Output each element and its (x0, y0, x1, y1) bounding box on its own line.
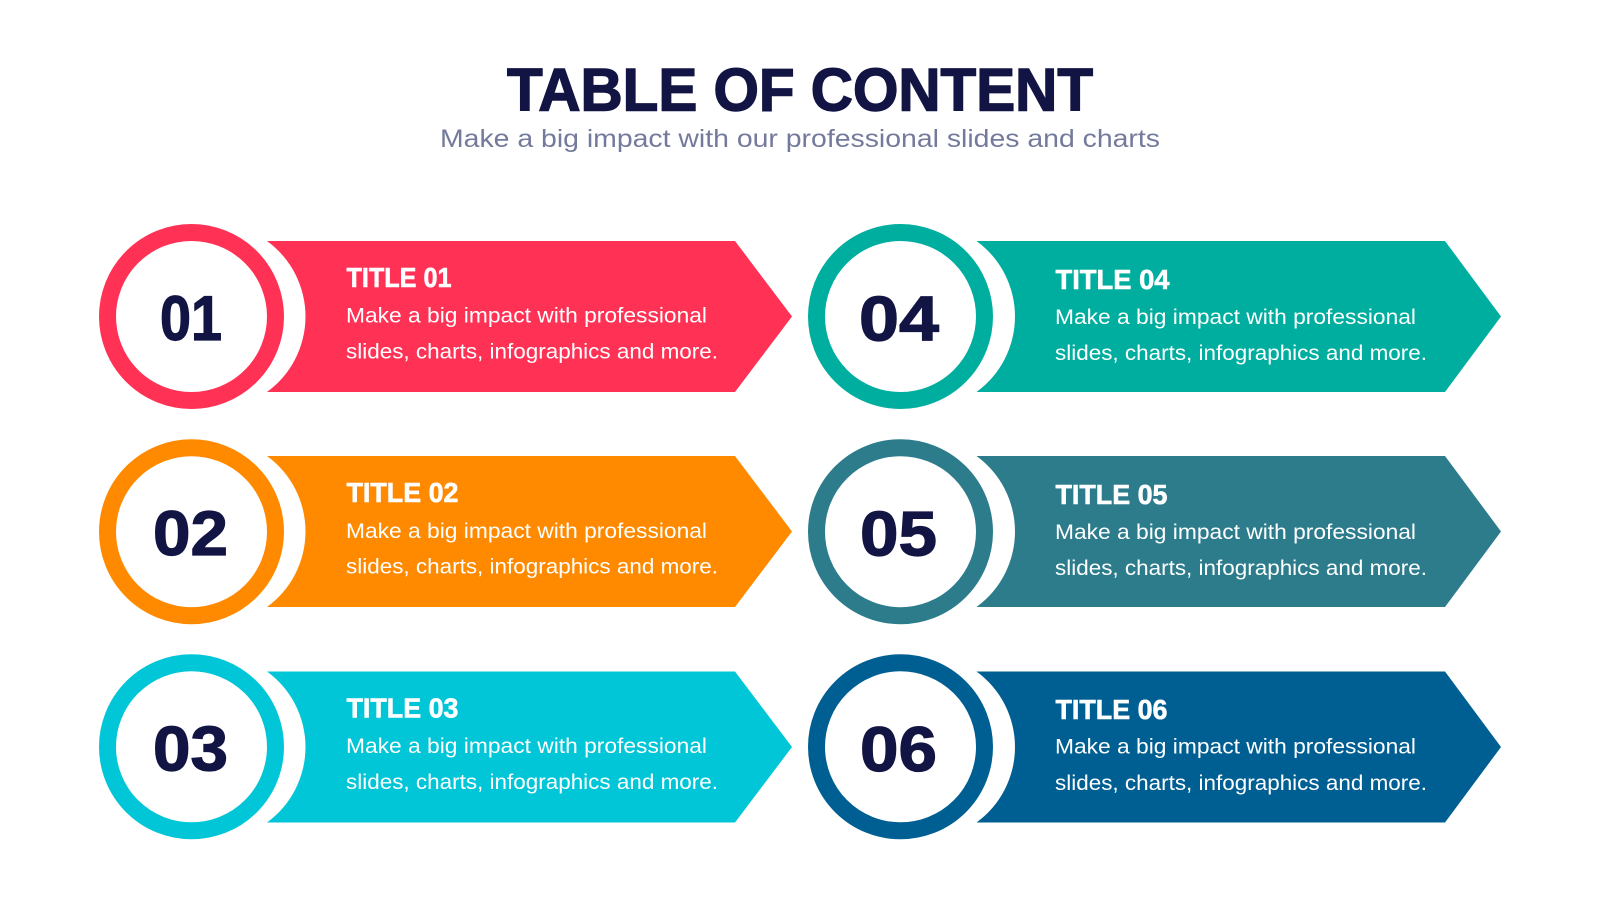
description 02: Make a big impact with professional (346, 520, 707, 543)
item 02 (108, 448, 792, 616)
ring 05 (816, 448, 984, 616)
description 04: slides, charts, infographics and more. (1055, 342, 1427, 365)
subtitle: Make a big impact with our professional slides and charts (440, 125, 1160, 153)
description 01: slides, charts, infographics and more. (346, 340, 718, 364)
description 06: Make a big impact with professional (1055, 735, 1416, 758)
description 01: Make a big impact with professional (346, 305, 707, 328)
banner 04 (976, 241, 1501, 392)
item 04 (816, 232, 1501, 400)
banner 02 (267, 456, 792, 607)
description 02: slides, charts, infographics and more. (346, 556, 718, 579)
ring 04 (816, 232, 984, 400)
heading 05: TITLE 05 (1056, 479, 1168, 510)
ring 06 (816, 663, 984, 831)
title: TABLE OF CONTENT (507, 56, 1093, 124)
number 03: 03 (153, 714, 228, 784)
banner 05 (976, 456, 1501, 607)
ring 02 (108, 448, 276, 616)
banner 06 (976, 672, 1501, 822)
description 06: slides, charts, infographics and more. (1055, 772, 1427, 795)
heading 06: TITLE 06 (1056, 694, 1168, 725)
heading 01: TITLE 01 (346, 262, 452, 293)
description 03: Make a big impact with professional (346, 735, 707, 758)
item 01 (108, 232, 792, 400)
description 03: slides, charts, infographics and more. (346, 771, 718, 794)
number 06: 06 (860, 715, 937, 785)
number 02: 02 (153, 499, 228, 569)
description 04: Make a big impact with professional (1055, 306, 1416, 329)
ring 03 (108, 663, 276, 831)
banner 01 (267, 241, 792, 392)
number 05: 05 (860, 500, 937, 570)
item 06 (816, 663, 1501, 831)
heading 04: TITLE 04 (1056, 264, 1170, 295)
item 03 (108, 663, 792, 831)
description 05: slides, charts, infographics and more. (1055, 557, 1427, 580)
description 05: Make a big impact with professional (1055, 521, 1416, 544)
heading 02: TITLE 02 (346, 477, 458, 508)
ring 01 (108, 232, 276, 400)
number 04: 04 (859, 284, 939, 354)
item 05 (816, 448, 1501, 616)
heading 03: TITLE 03 (346, 692, 458, 723)
banner 03 (267, 672, 792, 822)
number 01: 01 (160, 284, 222, 354)
